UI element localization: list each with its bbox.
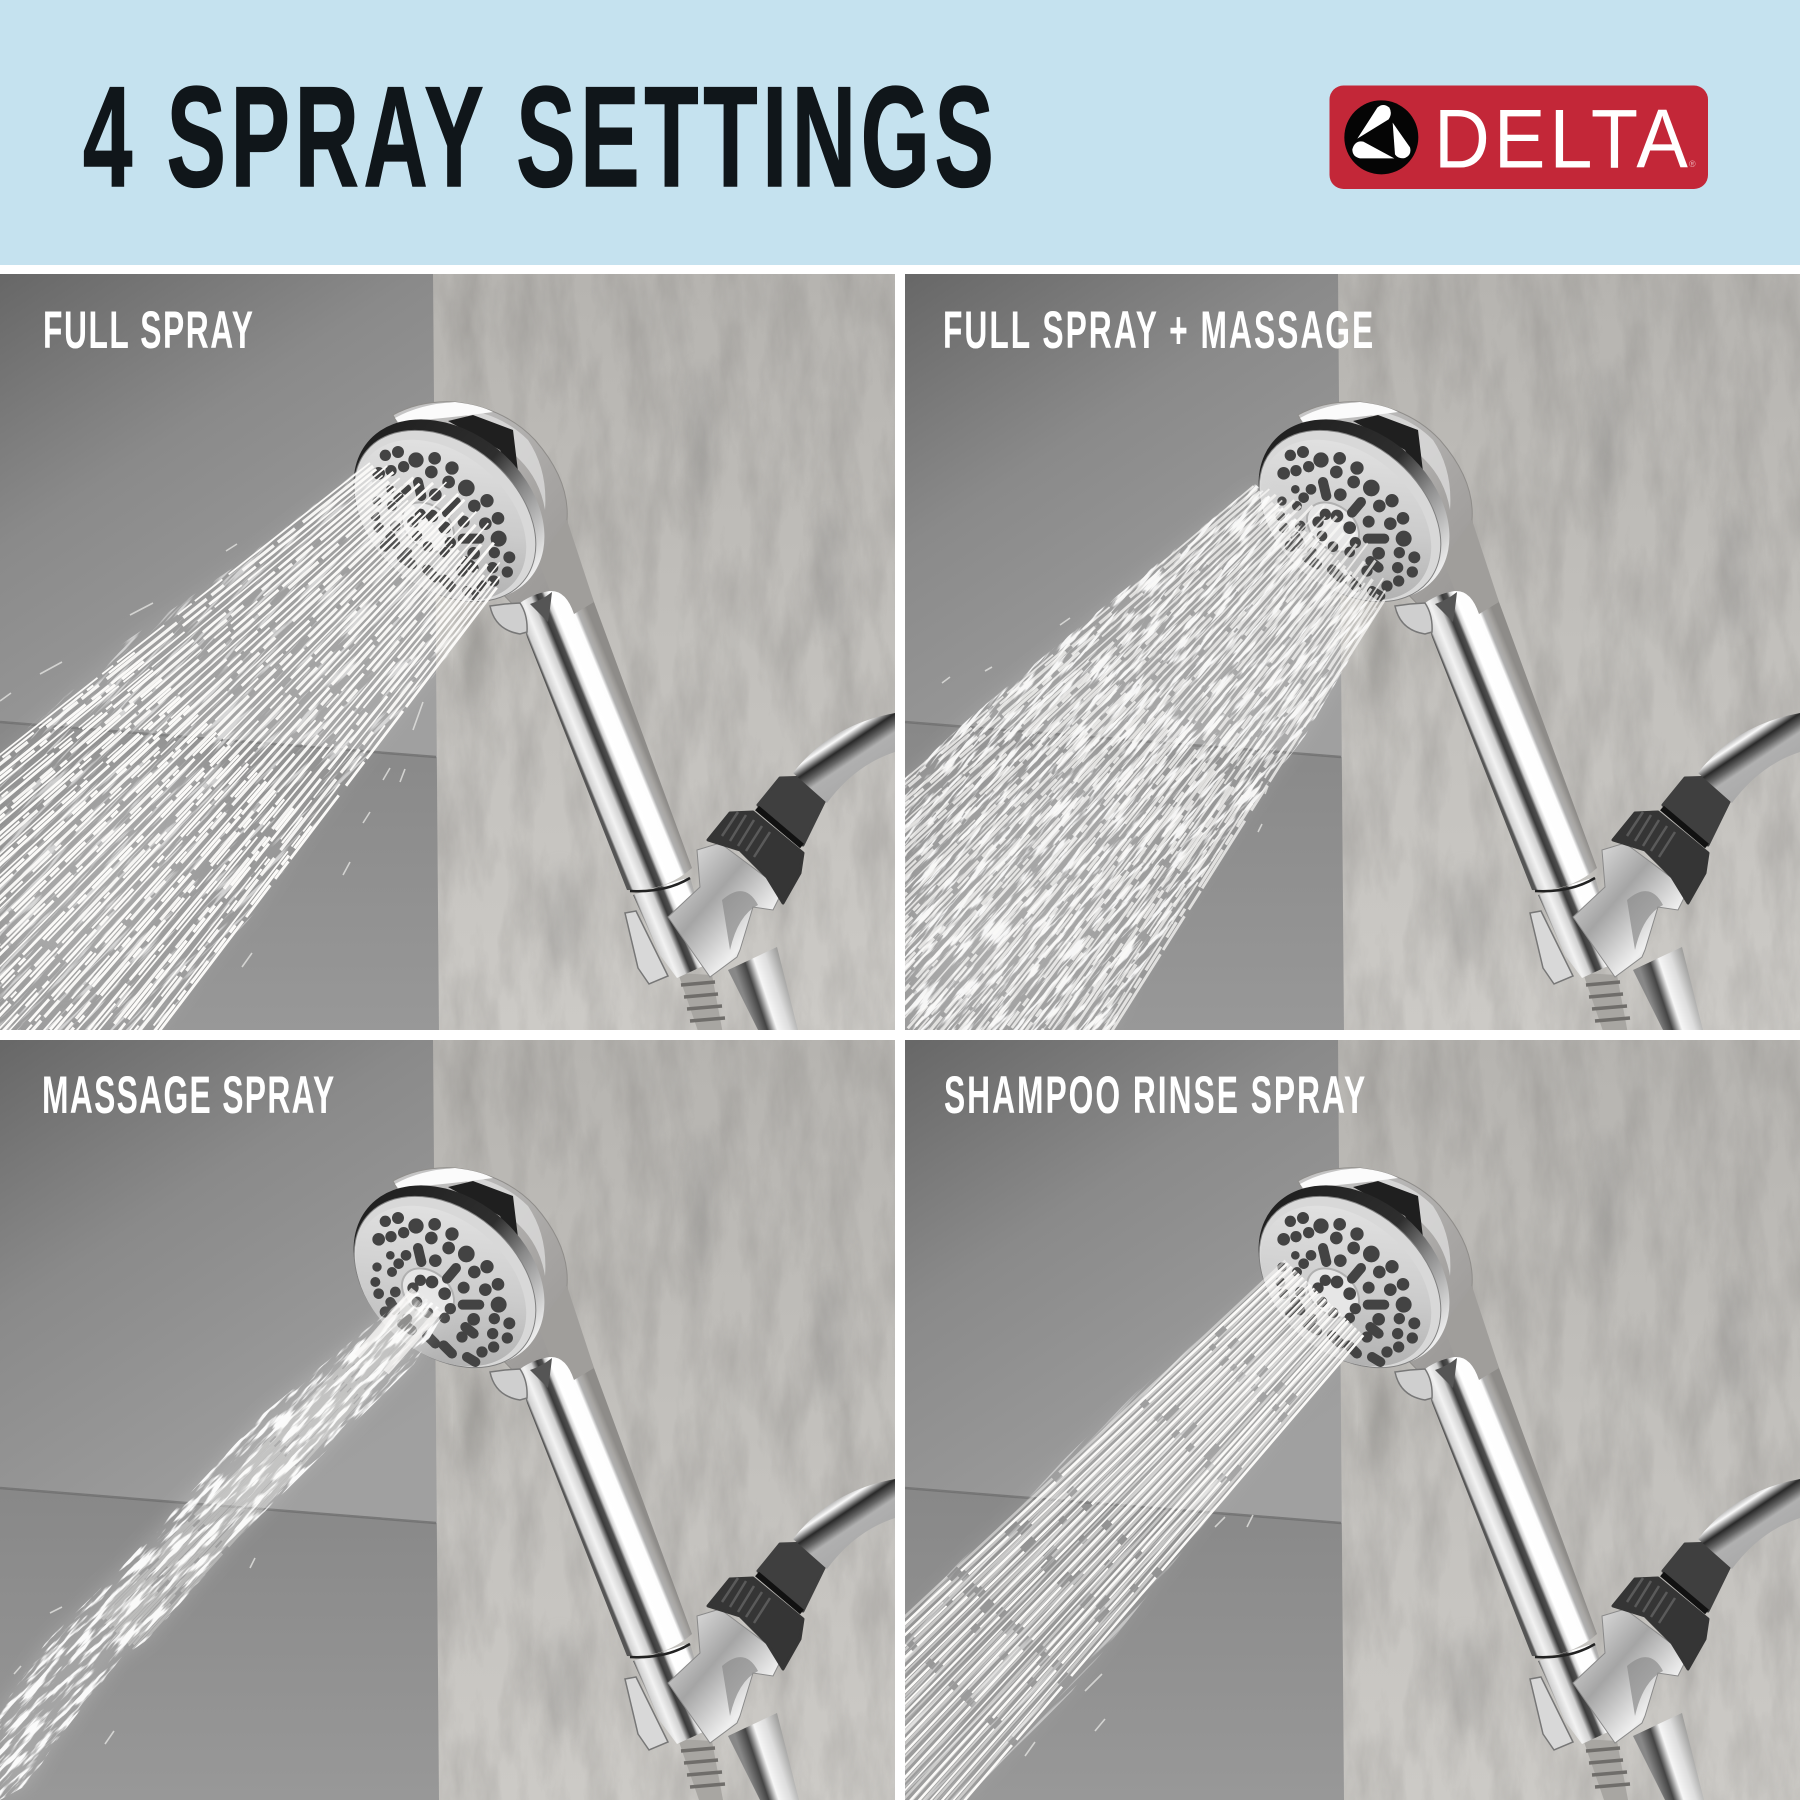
logo wordmark: DELTA bbox=[1434, 93, 1688, 186]
water spray bbox=[0, 462, 500, 1030]
stray droplets bbox=[942, 618, 1268, 1004]
label: full spray + massage: FULL SPRAY + MASSAGE bbox=[943, 301, 1373, 360]
water spray bbox=[0, 389, 1351, 1800]
panel: shampoo rinse spray bbox=[0, 389, 1800, 1800]
label: shampoo rinse spray: SHAMPOO RINSE SPRAY bbox=[944, 1066, 1365, 1125]
panel: full spray + massage bbox=[905, 274, 1800, 1030]
panel: full spray bbox=[0, 274, 895, 1030]
wall background bbox=[905, 274, 1800, 1034]
shower fixture bbox=[1223, 1148, 1800, 1800]
label: massage spray: MASSAGE SPRAY bbox=[42, 1066, 334, 1125]
logo mark bbox=[1344, 100, 1418, 174]
wall background bbox=[0, 274, 895, 1034]
stray droplets bbox=[0, 544, 423, 967]
stray droplets bbox=[1025, 1515, 1253, 1756]
title: 4 SPRAY SETTINGS bbox=[83, 57, 994, 217]
panel: massage spray bbox=[0, 389, 1351, 1800]
header band bbox=[0, 0, 1800, 265]
wall background bbox=[0, 1040, 895, 1800]
shower fixture bbox=[318, 382, 895, 1034]
Delta logo bbox=[1330, 86, 1708, 189]
stray droplets bbox=[14, 1558, 255, 1744]
wall background bbox=[905, 1040, 1800, 1800]
shower fixture bbox=[318, 1148, 895, 1800]
water spray bbox=[0, 389, 1800, 1800]
water spray bbox=[905, 484, 1386, 1030]
label: full spray: FULL SPRAY bbox=[43, 301, 253, 360]
registered mark: ® bbox=[1689, 159, 1696, 169]
shower fixture bbox=[1223, 382, 1800, 1034]
